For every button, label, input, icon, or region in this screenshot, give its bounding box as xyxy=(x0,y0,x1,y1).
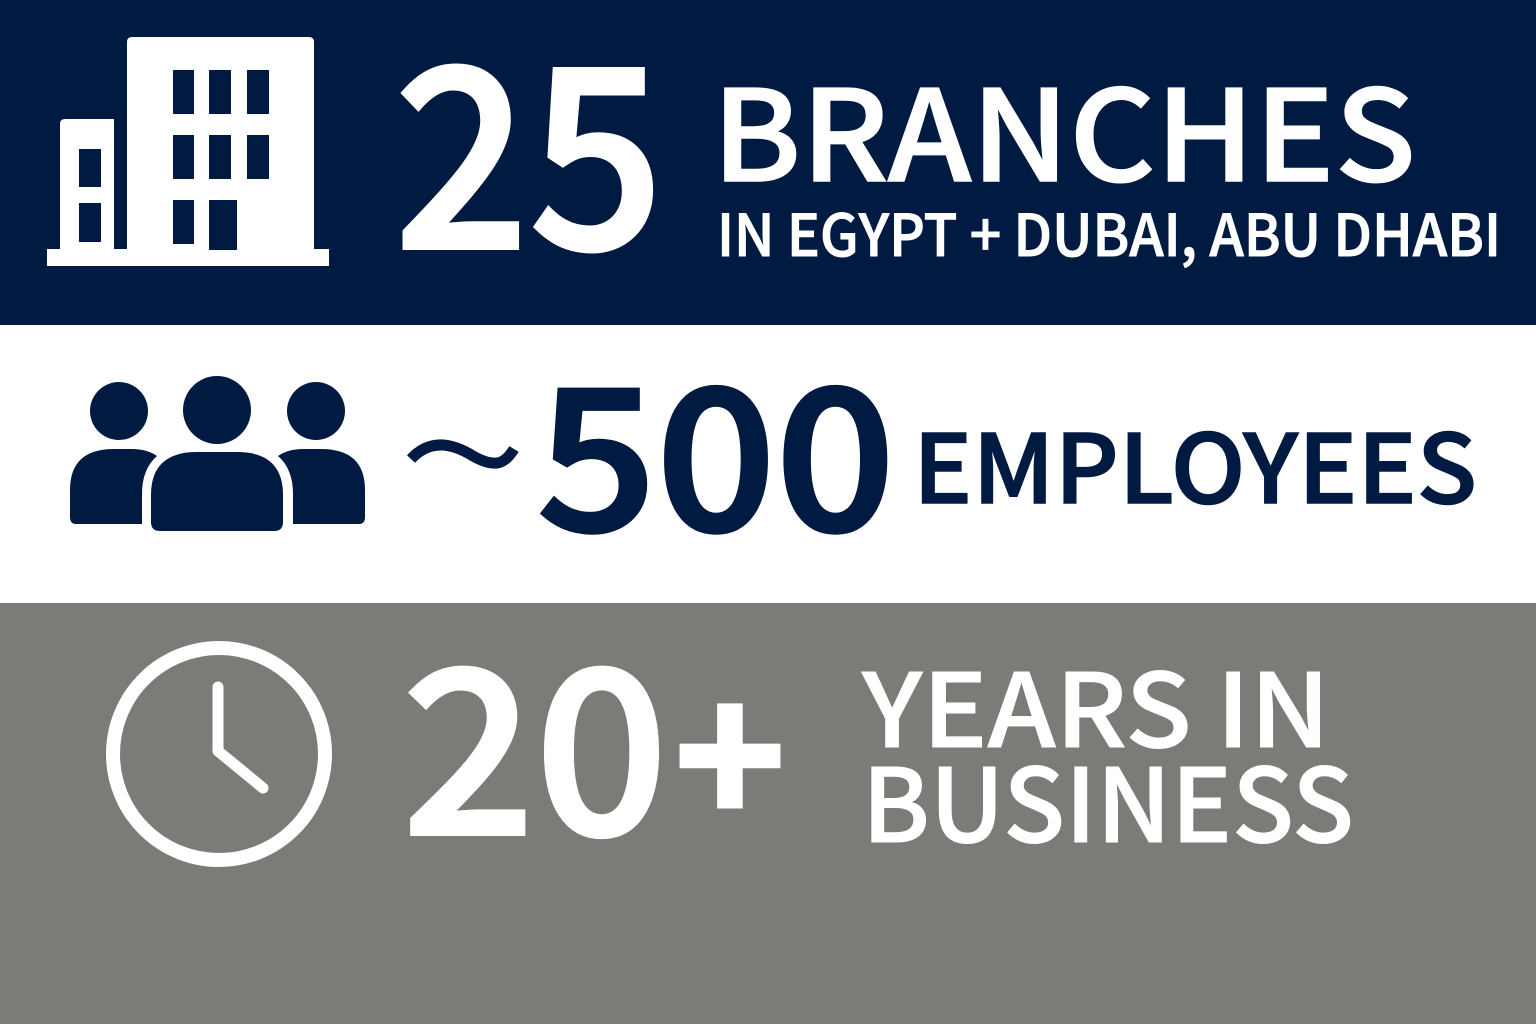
stat: 20+ xyxy=(402,570,783,900)
text: locations: IN EGYPT + DUBAI, ABU DHABI xyxy=(717,189,1501,273)
panel: years xyxy=(0,570,1536,1024)
stat: ~500 xyxy=(411,304,895,587)
heading: branches: BRANCHES xyxy=(712,36,1416,218)
stat: 20+: 20 xyxy=(402,570,668,900)
panel: employees xyxy=(0,304,1536,603)
heading: years in business: BUSINESS xyxy=(862,725,1354,872)
stat: 20+: + xyxy=(677,609,783,879)
heading: years in business xyxy=(861,630,1354,872)
icon: buildings xyxy=(47,37,329,266)
icon: people xyxy=(70,376,365,531)
heading: years in business: YEARS IN xyxy=(861,630,1330,777)
stat: ~500: 500 xyxy=(537,304,895,587)
panel: branches xyxy=(0,0,1536,325)
heading: employees: EMPLOYEES xyxy=(913,394,1477,531)
icon: clock xyxy=(113,648,325,860)
